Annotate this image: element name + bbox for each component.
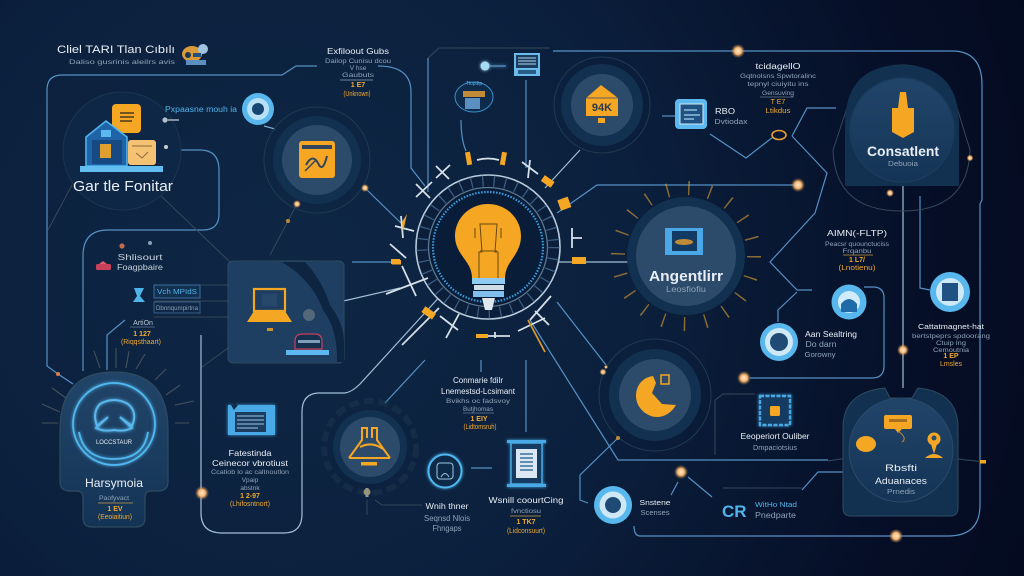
text: rbo: Dvtiodax <box>714 119 748 126</box>
boxes: labels <box>154 285 200 313</box>
heading: benefit <box>875 463 928 496</box>
text block: comarie: Lnemestsd-Lcsimant <box>441 387 516 396</box>
text: sealing: Aan Sealtring <box>805 330 857 339</box>
icon: cyan ring <box>73 383 155 465</box>
text block: tcidagello: Gensuving <box>762 90 794 97</box>
text block: cattatmagnet: bertstpeprs spdoorang <box>912 333 990 340</box>
icon: right badge <box>930 272 970 312</box>
text block: wsnill: 1 TK7 <box>516 519 536 526</box>
text block: tcidagello: tepnyl ciuiyitu ins <box>748 81 809 88</box>
text block: wsnill <box>488 495 564 535</box>
node: argentlirr: Leosfiofiu <box>666 285 706 294</box>
text block: artion: (Riqqsthaart) <box>121 339 161 346</box>
dots: right <box>674 344 909 543</box>
text block: exfiltrate: (Unknown) <box>344 91 370 98</box>
icon: orange doc card <box>299 141 335 178</box>
text: sealing: Do darn <box>806 340 836 349</box>
text block: exfiltrate: 1 E7 <box>351 82 365 89</box>
icon: speech <box>884 415 912 442</box>
icon: tan doc <box>128 140 156 165</box>
dot: left line <box>195 486 209 500</box>
text: snstene: Snstene <box>640 498 670 507</box>
label: CR: WitHo Ntad <box>755 500 797 509</box>
text: snstene: Scenses <box>640 508 670 517</box>
text block: aimn <box>825 229 890 272</box>
icon: blue screen <box>675 99 707 129</box>
panel: consatlent: Debuoia <box>888 161 918 168</box>
text: sealing <box>804 330 857 359</box>
text block: tcidagello: tcidagellO <box>756 62 800 71</box>
icon: blue pad <box>286 334 329 355</box>
text block: festinda: Vpaip <box>242 477 259 484</box>
text block: aimn: 1 L7/ <box>849 257 865 264</box>
icon: title emblem <box>182 44 208 65</box>
heading: consatlent: Consatlent <box>867 143 939 159</box>
text block: comarie: Bvikhs oc fadsvoy <box>446 398 511 405</box>
panel: harsymoia device: Paofyvact <box>99 495 129 502</box>
icon: pin <box>925 432 943 458</box>
text block: exfiltrate: Gaubuts <box>342 72 375 79</box>
label: CR <box>722 500 797 521</box>
text block: cattatmagnet: Cemoutnia <box>933 347 969 354</box>
ring: dotted <box>433 192 543 302</box>
icon: sealing badge <box>760 323 798 361</box>
text block: aimn: AIMN(-FLTP) <box>827 229 887 238</box>
panel: laptop <box>228 261 344 363</box>
text block: festinda: abstnk <box>240 485 260 492</box>
title: Daliso gusrinis aleilrs avis <box>69 59 176 66</box>
text block: comarie: Conmarie fdilr <box>453 376 503 385</box>
icon: bottom cyan badge <box>594 486 632 524</box>
text block: wsnill: fvnctiosu <box>511 508 541 515</box>
text block: festinda: Fatestinda <box>228 449 272 458</box>
icon: blue doc <box>228 405 275 435</box>
icon: orange laptop <box>247 289 292 331</box>
marker: orange bug <box>772 130 786 140</box>
text: sealing: Gorowny <box>804 352 836 359</box>
title: Cliel TARI Tlan Cıbılı <box>57 44 175 56</box>
node: flask circle <box>324 401 416 493</box>
panel: harsymoia device: LOCCSTAUR <box>96 439 132 446</box>
text: rbo <box>714 107 748 126</box>
text block: comarie: Butjhomas <box>463 406 494 413</box>
boxes: labels: Dbnnqumpirtna <box>156 305 198 312</box>
icon: globe badge <box>455 81 493 112</box>
icon: sealing badge top <box>832 284 866 320</box>
icon: red car <box>96 243 125 270</box>
marker: right <box>980 460 986 464</box>
node: crescent circle <box>599 339 711 451</box>
icon: blue house <box>86 121 127 166</box>
text block: wnih <box>424 502 470 533</box>
icon: cyan ring wmlh <box>428 454 462 488</box>
text: rbo: RBO <box>715 107 735 116</box>
text block: wnih: Wnih thner <box>426 502 469 511</box>
icon: gear badge <box>242 93 275 129</box>
text block: wnih: Seqnsd Nlois <box>424 514 470 523</box>
text block: aimn: Frqanbu <box>842 248 872 255</box>
text block: cattatmagnet: Ctuip lng <box>936 340 966 347</box>
text block: festinda: 1 2-97 <box>240 493 260 500</box>
marker: orange tip <box>392 260 401 264</box>
text block: artion: 1 127 <box>133 331 151 338</box>
heading: benefit: Aduanaces <box>875 476 928 486</box>
label: shlisourt <box>117 253 164 272</box>
heading: harsymoia: Harsymoia <box>85 476 143 490</box>
icon: globe badge: Tlopdip <box>466 81 482 87</box>
text block: comarie: (Lidtomsruh) <box>464 424 496 431</box>
panel: harsymoia device: (Eeoiaitiun) <box>98 514 132 521</box>
markers: orange gadgets <box>391 152 586 352</box>
text block: festinda: Ccatiob lo ac caltnoutlon <box>211 469 289 476</box>
label: CR: Pnedparte <box>755 511 797 520</box>
node: argentlirr <box>618 188 754 324</box>
dots: small glow <box>56 184 369 376</box>
icon: stamp <box>760 396 790 425</box>
text block: cattatmagnet: Cattatmagnet-hat <box>918 322 985 331</box>
icon: top doc <box>514 53 540 76</box>
icon: orange house: 94K <box>592 102 612 114</box>
label: shlisourt: Foagpbaire <box>117 263 164 272</box>
text block: cattatmagnet <box>912 322 990 368</box>
title <box>57 44 176 66</box>
ring: outer <box>416 175 560 319</box>
panel: garage <box>63 92 181 210</box>
icon: blob <box>856 436 876 452</box>
label: shlisourt: Shlisourt <box>118 253 164 262</box>
text block: exfiltrate <box>325 47 391 98</box>
connector lines <box>47 48 985 536</box>
rays: harsymoia <box>42 348 194 423</box>
node: small connectors <box>148 117 179 245</box>
node: house circle <box>554 57 650 153</box>
text block: exfiltrate: V hse <box>350 65 367 72</box>
text block: festinda: Ceinecor vbrotiust <box>212 459 289 468</box>
node: bulb <box>416 175 560 319</box>
text block: wnih: Fhngaps <box>432 524 462 533</box>
text block: comarie: 1 EIY <box>470 416 488 423</box>
text block: comarie <box>441 376 516 431</box>
dots: crescent <box>600 365 620 440</box>
text block: festinda: (Lhifosntnort) <box>230 501 270 508</box>
dot: top <box>731 44 745 58</box>
text block: artion: ArtiOn <box>133 320 153 327</box>
text block: wsnill: (Lidconsuurt) <box>507 528 545 535</box>
text: snstene <box>640 498 670 517</box>
icon: lightbulb <box>455 204 521 310</box>
panel: harsymoia device: 1 EV <box>107 506 123 513</box>
text block: festinda <box>211 449 289 508</box>
text block: artion <box>121 320 161 346</box>
text: eeoperiort <box>740 432 810 452</box>
text: eeoperiort: Dmpaciotsius <box>753 445 798 452</box>
dots: consatlent <box>886 154 974 197</box>
text block: exfiltrate: Exfiloout Gubs <box>327 47 389 56</box>
icon: blue chart <box>665 228 703 255</box>
icon: cyan figure <box>133 288 145 302</box>
label: CR: CR <box>722 502 747 521</box>
text block: tcidagello <box>740 62 817 115</box>
text block: tcidagello: Gqtnolsns Spwtoralinc <box>740 73 817 80</box>
panel: consatlent <box>833 65 970 211</box>
panel: harsymoia device <box>60 372 168 527</box>
text block: tcidagello: Ltikdus <box>766 108 791 115</box>
marker: bottom lamp <box>364 488 370 497</box>
icon: orange tower <box>892 92 914 138</box>
text: eeoperiort: Eeoperiort Ouliber <box>740 432 810 441</box>
boxes: labels: Vch MPIdS <box>157 287 197 296</box>
icon: blue tablet <box>507 440 546 487</box>
icon: flask <box>349 428 390 464</box>
text block: aimn: (Lnotienu) <box>838 265 876 272</box>
heading: benefit: Prnedis <box>887 489 916 496</box>
icon: orange doc <box>112 104 141 133</box>
spokes and gadgets <box>386 158 582 345</box>
text block: aimn: Peacsr quounctuciss <box>825 241 890 248</box>
text block: tcidagello: T E7 <box>771 99 785 106</box>
label: cyan caption: Pxpaasne mouh ia <box>165 105 238 114</box>
icon: crescent <box>636 375 676 417</box>
top: glow circle <box>480 62 506 70</box>
text block: cattatmagnet: 1 EP <box>943 353 959 360</box>
heading: garage: Gar tle Fonitar <box>73 179 173 195</box>
heading: argentlirr: Angentlirr <box>649 268 723 285</box>
text block: cattatmagnet: Lmsles <box>940 361 962 368</box>
dot: right mid <box>791 178 805 192</box>
panel: benefit advances <box>843 388 958 516</box>
text block: wsnill: Wsnill coourtCing <box>488 495 564 505</box>
node: doc circle <box>264 107 370 213</box>
heading: benefit: Rbsfti <box>885 463 917 473</box>
text block: exfiltrate: Dailop Cunisu dcou <box>325 58 391 65</box>
